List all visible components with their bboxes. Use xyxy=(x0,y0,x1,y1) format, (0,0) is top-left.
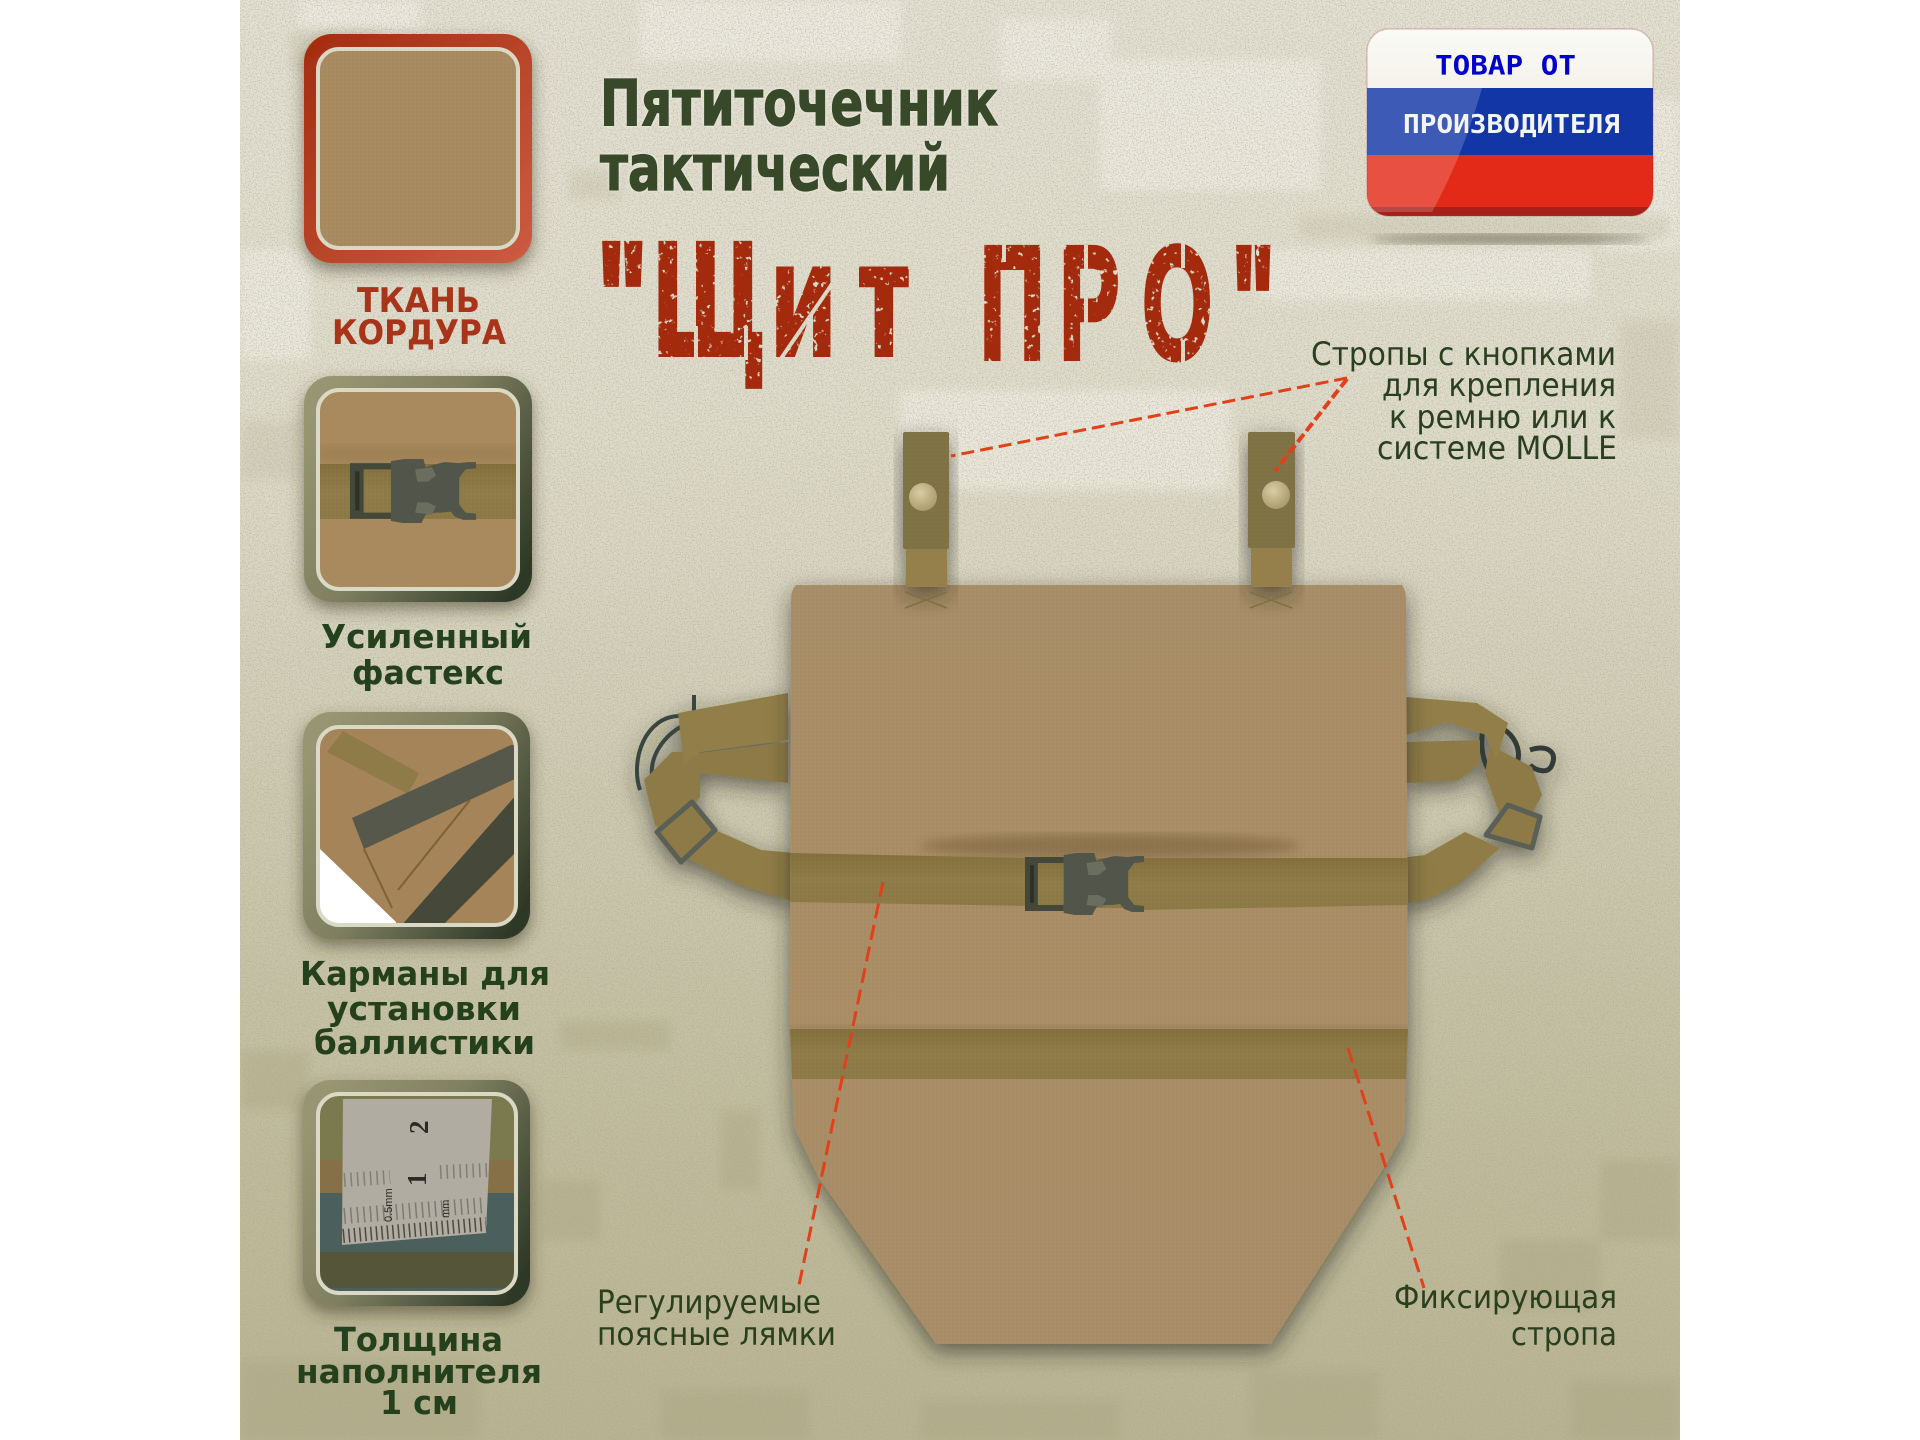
caption: waist straps xyxy=(597,1283,836,1353)
badge: made by manufacturer flag: ТОВАР ОТ xyxy=(1435,50,1576,82)
label: filler thickness: 1 см xyxy=(380,1383,458,1422)
label: cordura fabric xyxy=(332,281,507,353)
icon: central buckle xyxy=(1025,853,1144,915)
tile: cordura fabric xyxy=(304,34,532,263)
label: ballistic pockets: Карманы для xyxy=(300,954,550,993)
left attachment strap with snap xyxy=(903,432,949,587)
label: ballistic pockets xyxy=(300,954,550,1062)
caption: waist straps: Регулируемые xyxy=(597,1283,821,1321)
label: filler thickness xyxy=(296,1320,542,1422)
badge: made by manufacturer flag: ПРОИЗВОДИТЕЛЯ xyxy=(1403,110,1620,140)
label: filler thickness: Толщина xyxy=(334,1320,503,1359)
title: product name stencil: ПРО" xyxy=(980,215,1274,393)
tile: filler thickness with ruler: 2 xyxy=(404,1120,434,1134)
caption: fixing strap: Фиксирующая xyxy=(1394,1278,1617,1316)
label: reinforced fastex: фастекс xyxy=(352,653,504,692)
caption: attachment straps: системе MOLLE xyxy=(1377,429,1617,467)
caption: attachment straps: Стропы с кнопками xyxy=(1311,335,1616,373)
label: ballistic pockets: установки xyxy=(327,989,521,1028)
label: reinforced fastex: Усиленный xyxy=(321,617,532,656)
label: cordura fabric: КОРДУРА xyxy=(332,313,507,353)
label: cordura fabric: ТКАНЬ xyxy=(357,281,480,321)
panel body xyxy=(790,585,1408,1344)
caption: attachment straps: для крепления xyxy=(1382,366,1616,404)
title: product type xyxy=(600,67,998,205)
caption: fixing strap: стропа xyxy=(1511,1315,1617,1353)
caption: waist straps: поясные лямки xyxy=(597,1315,836,1353)
side straps and cords xyxy=(637,693,1553,905)
tile: filler thickness with ruler: 1 xyxy=(402,1172,432,1186)
arrow: fixing strap leader line xyxy=(1348,1048,1424,1288)
label: reinforced fastex xyxy=(321,617,532,692)
label: filler thickness: наполнителя xyxy=(296,1352,542,1391)
tile: reinforced fastex buckle xyxy=(304,376,532,602)
caption: attachment straps xyxy=(1311,335,1617,467)
caption: fixing strap xyxy=(1394,1278,1617,1353)
tile: filler thickness with ruler: mm xyxy=(440,1200,452,1218)
tile: ballistic pockets xyxy=(303,712,530,939)
badge: made by manufacturer flag xyxy=(1367,29,1653,244)
panel: camouflage background xyxy=(240,0,1680,1440)
right attachment strap with snap xyxy=(1248,432,1295,587)
arrows: attachment strap leader lines xyxy=(951,378,1347,471)
arrow: waist strap leader line xyxy=(798,882,883,1290)
title: product name stencil xyxy=(602,240,1270,389)
panel shading and straps xyxy=(790,832,1408,1079)
tile: filler thickness with ruler xyxy=(303,1080,530,1306)
title: product type: тактический xyxy=(600,132,950,205)
title: product type: Пятиточечник xyxy=(600,67,998,140)
waist belt xyxy=(790,853,1030,906)
stitching marks on panel top xyxy=(905,592,1292,608)
label: ballistic pockets: баллистики xyxy=(314,1023,535,1062)
title: product name stencil: "Щит xyxy=(597,209,910,388)
tile: filler thickness with ruler: 0.5mm xyxy=(383,1188,395,1222)
product: five-point tactical panel xyxy=(637,585,1553,1345)
caption: attachment straps: к ремню или к xyxy=(1389,398,1616,436)
